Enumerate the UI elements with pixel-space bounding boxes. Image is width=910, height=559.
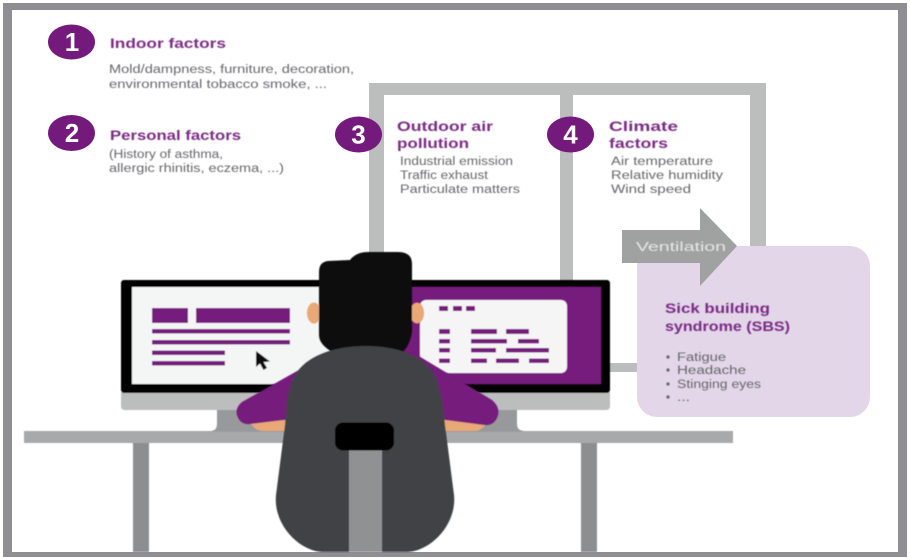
factor 3: outdoor air pollution: Traffic exhaust [400, 170, 489, 182]
factor 4: climate factors [547, 116, 723, 196]
arms [237, 352, 498, 431]
desk [24, 431, 733, 552]
factor 3: outdoor air pollution: Industrial emission [400, 156, 513, 168]
factor 2: personal factors: (History of asthma, [109, 149, 223, 161]
hair [319, 252, 412, 353]
factor 2: personal factors: Personal factors [110, 128, 241, 143]
monitor [121, 280, 610, 432]
arrow: ventilation [622, 208, 737, 286]
factor 3: outdoor air pollution: pollution [397, 136, 469, 151]
panel: sick building syndrome: Stinging eyes [677, 379, 761, 391]
chair pole [349, 450, 382, 552]
factor 3: outdoor air pollution: Outdoor air [397, 119, 494, 134]
icon: mouse cursor [256, 351, 270, 370]
factor 3: outdoor air pollution: 3 [351, 120, 366, 150]
factor 4: climate factors: Climate [609, 119, 679, 134]
factor 2: personal factors: 2 [65, 118, 79, 148]
arrow: ventilation: Ventilation [636, 239, 726, 254]
factor 4: climate factors: factors [609, 136, 668, 151]
factor 4: climate factors: Wind speed [611, 184, 691, 196]
panel: sick building syndrome [637, 246, 870, 417]
factor 1: indoor factors [48, 24, 354, 91]
chair handle [335, 422, 394, 450]
factor 2: personal factors: allergic rhinitis, eczema, ...) [109, 163, 284, 175]
factor 4: climate factors: Relative humidity [611, 170, 723, 182]
panel: sick building syndrome: Headache [677, 365, 746, 377]
panel: sick building syndrome: Fatigue [677, 352, 726, 364]
factor 3: outdoor air pollution [335, 116, 520, 196]
ears [307, 302, 424, 324]
panel: sick building syndrome: syndrome (SBS) [665, 319, 790, 334]
person at desk [237, 252, 498, 552]
factor 1: indoor factors: Indoor factors [110, 36, 226, 51]
factor 2: personal factors [48, 115, 284, 175]
left screen content [152, 308, 290, 366]
factor 1: indoor factors: Mold/dampness, furniture, decoration, [109, 64, 354, 76]
window frame [369, 83, 766, 372]
panel: sick building syndrome: ... [677, 392, 690, 404]
factor 1: indoor factors: environmental tobacco smoke, ... [109, 79, 327, 91]
factor 1: indoor factors: 1 [65, 27, 79, 57]
right screen panel [420, 300, 567, 373]
chair back [276, 346, 454, 552]
factor 3: outdoor air pollution: Particulate matters [400, 184, 520, 196]
factor 4: climate factors: Air temperature [611, 156, 713, 168]
factor 4: climate factors: 4 [563, 120, 578, 150]
panel: sick building syndrome: Sick building [665, 301, 770, 316]
